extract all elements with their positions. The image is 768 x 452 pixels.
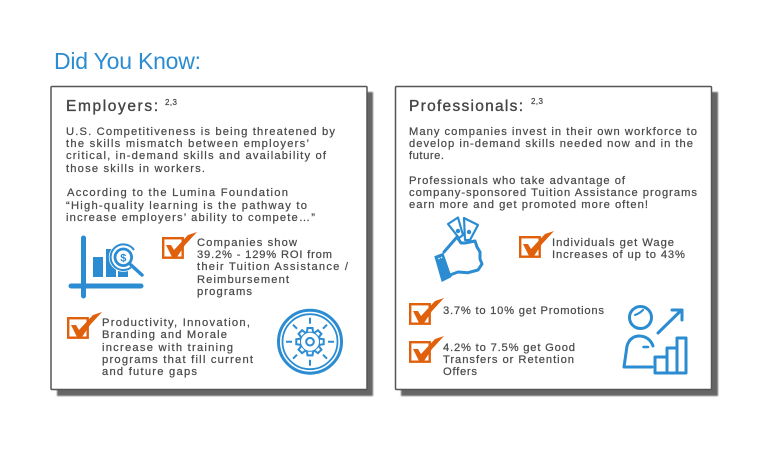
icon: checkbox productivity	[68, 312, 102, 338]
text: invest: Many companies invest in their own workforce to	[409, 126, 697, 138]
text: wage: Increases of up to 43%	[552, 249, 685, 261]
heading: employers: Employers:	[66, 98, 158, 115]
panel shadow	[57, 92, 373, 396]
text: productivity: Productivity, Innovation,	[102, 317, 250, 329]
text: competitiveness: the skills mismatch between employers’	[66, 138, 309, 150]
text: competitiveness	[66, 126, 335, 175]
text: transfers: Offers	[443, 366, 477, 378]
text: productivity: increase with training	[102, 342, 233, 354]
heading: professionals: 2,3	[531, 97, 544, 106]
panel: professionals	[396, 86, 718, 396]
text: tuition assistance: earn more and get promoted more often!	[409, 199, 648, 211]
text: roi: their Tuition Assistance /	[197, 261, 349, 273]
text: transfers	[443, 342, 575, 378]
text: roi: 39.2% - 129% ROI from	[197, 249, 332, 261]
heading: employers: 2,3	[165, 98, 178, 107]
icon: checkbox wage	[520, 231, 554, 257]
text: roi: Companies show	[197, 237, 298, 249]
text: promotions: 3.7% to 10% get Promotions	[443, 305, 604, 317]
panel box	[51, 86, 367, 390]
text: invest: future.	[409, 150, 444, 162]
panel: employers	[51, 86, 373, 396]
text: lumina quote: According to the Lumina Foundation	[67, 187, 288, 199]
title: Did You Know:	[54, 48, 201, 74]
panel box	[396, 86, 712, 390]
text: lumina quote: “High-quality learning is the pathway to	[66, 200, 307, 212]
icon: checkbox roi	[163, 232, 197, 258]
text: productivity: and future gaps	[102, 366, 197, 378]
text: productivity	[102, 317, 254, 378]
text: tuition assistance: company-sponsored Tuition Assistance programs	[409, 187, 697, 199]
text: productivity: programs that fill current	[102, 354, 254, 366]
icon: hand holding money	[434, 218, 482, 282]
text: lumina quote	[66, 187, 315, 224]
icon: gear dial	[278, 310, 342, 373]
text: roi	[197, 237, 349, 298]
text: invest	[409, 126, 697, 162]
text: invest: develop in-demand skills needed now and in the	[409, 138, 693, 150]
icon: bar chart with magnifier: $	[120, 252, 126, 264]
heading: professionals: Professionals:	[409, 98, 523, 115]
text: lumina quote: increase employers’ ability to compete…”	[66, 212, 315, 224]
text: tuition assistance: Professionals who take advantage of	[409, 175, 626, 187]
text: wage	[552, 237, 685, 261]
text: tuition assistance	[409, 175, 697, 211]
text: productivity: Branding and Morale	[102, 329, 227, 341]
text: roi: programs	[197, 286, 252, 298]
icon: person with growth chart	[624, 306, 686, 373]
icon: checkbox transfers	[410, 336, 444, 362]
icon: bar chart with magnifier	[71, 238, 142, 296]
text: competitiveness: those skills in workers.	[66, 163, 205, 175]
text: competitiveness: critical, in-demand skills and availability of	[66, 150, 327, 162]
text: roi: Reimbursement	[197, 274, 290, 286]
text: competitiveness: U.S. Competitiveness is being threatened by	[66, 126, 335, 138]
panel shadow	[401, 92, 718, 396]
text: wage: Individuals get Wage	[552, 237, 674, 249]
icon: checkbox promotions	[410, 298, 444, 324]
text: transfers: Transfers or Retention	[443, 354, 574, 366]
text: transfers: 4.2% to 7.5% get Good	[443, 342, 575, 354]
